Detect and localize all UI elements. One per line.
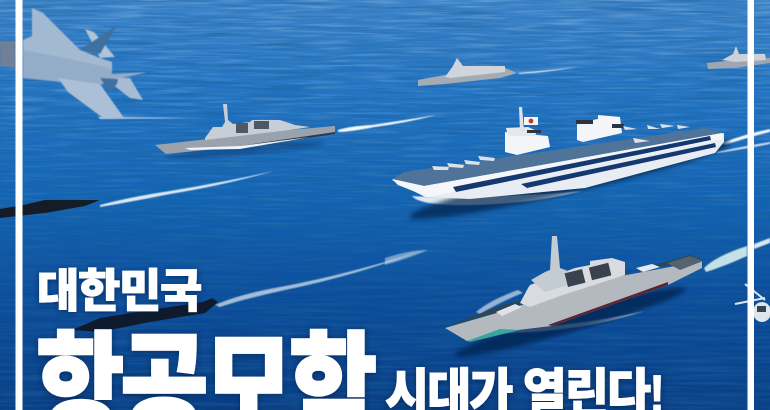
carrier hull	[392, 133, 724, 199]
carrier hull stripes	[453, 136, 716, 192]
title: line 1: 대한민국	[37, 265, 201, 317]
aircraft carrier	[392, 107, 734, 230]
wakes	[98, 67, 770, 333]
hull	[445, 261, 702, 341]
frigate (back centre)	[418, 58, 517, 86]
destroyer (mid left)	[155, 104, 335, 162]
icon: Korean flag	[524, 117, 538, 125]
submarine (left)	[0, 200, 100, 218]
carrier front island	[505, 107, 550, 155]
frigate (far right)	[707, 46, 770, 69]
submarine (lower)	[72, 298, 218, 332]
parked aircraft	[432, 124, 690, 170]
carrier rear island	[576, 115, 624, 142]
destroyer (foreground)	[445, 236, 703, 365]
fighter jet	[0, 8, 147, 118]
superstructure	[520, 258, 625, 307]
helicopter	[735, 284, 770, 322]
carrier flight deck	[392, 128, 722, 186]
deck	[445, 255, 703, 327]
